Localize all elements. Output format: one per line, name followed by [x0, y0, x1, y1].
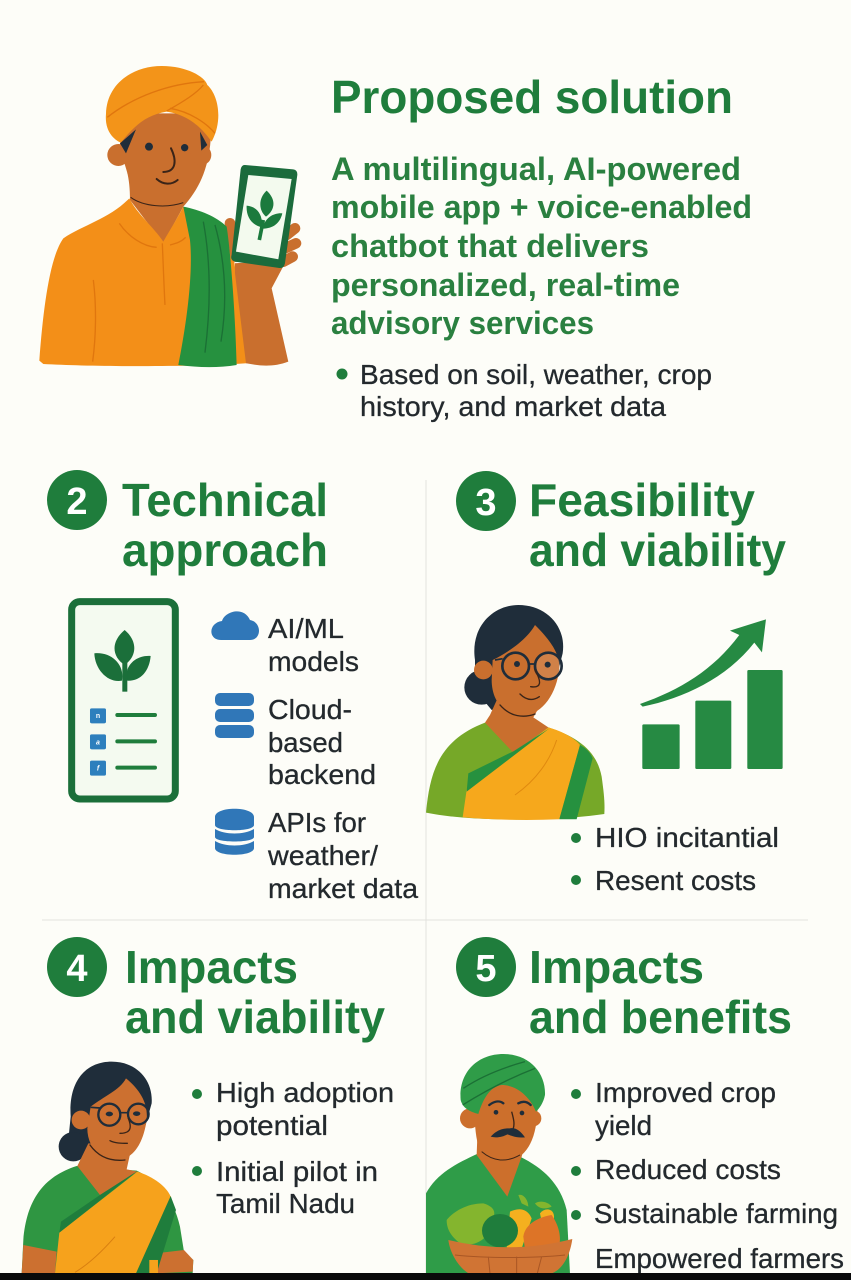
subheading text: chatbot that delivers [331, 228, 649, 264]
number badge 2: 2 [66, 481, 88, 523]
bullets: feasibility: Resent costs [595, 865, 756, 896]
bullets: adoption and pilot: potential [216, 1110, 328, 1141]
chart: rising bars with arrow [640, 619, 783, 769]
heading: impacts and viability [125, 941, 385, 1043]
panel: proposed solution [39, 66, 752, 422]
icon: phone app mockup [72, 602, 175, 799]
subheading text: mobile app + voice-enabled [331, 189, 752, 225]
item: APIs for weather and market data: APIs for [268, 807, 366, 838]
bullets: benefits: yield [595, 1110, 652, 1141]
bullets: benefits: Reduced costs [595, 1154, 781, 1185]
subheading text: personalized, real-time [331, 267, 680, 303]
panel: impacts and benefits [426, 937, 844, 1274]
number badge 5: 5 [475, 948, 497, 990]
subheading text: advisory services [331, 305, 594, 341]
panel: technical approach [47, 470, 418, 904]
item: AI/ML models: models [268, 646, 359, 677]
panel: feasibility and viability [426, 471, 786, 896]
bullets: feasibility: HIO incitantial [595, 822, 779, 853]
panel: impacts and viability [22, 937, 394, 1273]
number badge 4 [47, 937, 107, 997]
bullets: benefits [571, 1077, 844, 1274]
heading: feasibility and viability: Feasibility [529, 474, 755, 526]
heading: impacts and benefits [529, 941, 792, 1043]
item: cloud-based backend [215, 693, 376, 790]
bullets: feasibility [571, 822, 779, 896]
subheading text [331, 151, 752, 341]
item: cloud-based backend: backend [268, 759, 376, 790]
icon: phone app mockup: a [96, 739, 100, 746]
subheading text: A multilingual, AI-powered [331, 151, 741, 187]
bullets: benefits: Sustainable farming [594, 1198, 838, 1229]
heading: technical approach: Technical [122, 474, 328, 526]
bullet: data sources: history, and market data [360, 391, 666, 422]
item: APIs for weather and market data: market data [268, 873, 418, 904]
heading: feasibility and viability: and viability [529, 524, 786, 576]
number badge 5 [456, 937, 516, 997]
bullets: benefits: Improved crop [595, 1077, 776, 1108]
heading: feasibility and viability [529, 474, 786, 576]
heading: impacts and benefits: Impacts [529, 941, 704, 993]
number badge 3: 3 [475, 482, 497, 524]
bullets: adoption and pilot: High adoption [216, 1077, 394, 1108]
heading: technical approach [122, 474, 328, 576]
bullet: data sources [336, 359, 712, 422]
heading: impacts and viability: and viability [125, 991, 385, 1043]
number badge 2 [47, 470, 107, 530]
bullets: adoption and pilot: Tamil Nadu [216, 1188, 355, 1219]
item: cloud-based backend: based [268, 727, 343, 758]
item: cloud-based backend: Cloud- [268, 694, 352, 725]
icon: phone app mockup: f [97, 766, 100, 773]
item: APIs for weather and market data [215, 807, 418, 904]
bullets: benefits: Empowered farmers [595, 1243, 844, 1274]
illustration: woman in green sari [22, 1062, 193, 1273]
heading: proposed solution: Proposed solution [331, 71, 733, 123]
item: AI/ML models: AI/ML [268, 613, 344, 644]
number badge 4: 4 [66, 948, 88, 990]
heading: impacts and benefits: and benefits [529, 991, 792, 1043]
heading: technical approach: approach [122, 524, 328, 576]
number badge 3 [456, 471, 516, 531]
item: APIs for weather and market data: weather/ [267, 840, 378, 871]
item: AI/ML models [211, 611, 359, 677]
bullet: data sources: Based on soil, weather, crop [360, 359, 712, 390]
icon: phone app mockup: n [96, 713, 100, 720]
illustration: farmer with vegetable basket [426, 1054, 572, 1273]
illustration: woman with glasses [426, 605, 605, 820]
bullets: adoption and pilot: Initial pilot in [216, 1156, 378, 1187]
bullets: adoption and pilot [192, 1077, 394, 1219]
illustration: farmer with phone [39, 66, 297, 367]
heading: impacts and viability: Impacts [125, 941, 298, 993]
